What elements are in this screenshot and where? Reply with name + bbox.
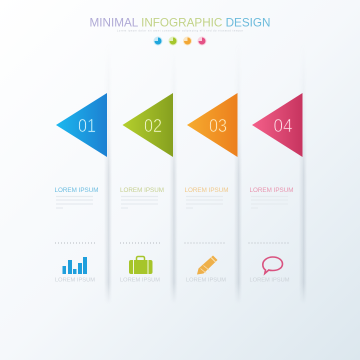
text block 4: LOREM IPSUM (250, 188, 294, 194)
triangle 02 (122, 93, 173, 157)
triangle 01: 01 (78, 116, 96, 136)
text block 4 (250, 188, 294, 208)
column fold shadows (105, 107, 306, 298)
icon: bar chart (62, 257, 87, 274)
text block 3: LOREM IPSUM (184, 188, 228, 194)
triangle 02: 02 (144, 116, 162, 136)
icon: pencil (197, 256, 218, 274)
caption 3: LOREM IPSUM (186, 278, 226, 284)
text block 3 (184, 188, 228, 208)
caption 2: LOREM IPSUM (120, 278, 160, 284)
icon: briefcase (129, 256, 152, 274)
text block 1 (54, 188, 98, 208)
triangle 04 (252, 93, 302, 157)
triangle 01 (56, 93, 107, 157)
caption 4: LOREM IPSUM (250, 278, 290, 284)
triangle 04: 04 (274, 116, 292, 136)
text block 2: LOREM IPSUM (120, 188, 164, 194)
icon: four colored dots (154, 36, 206, 46)
triangle 03: 03 (209, 116, 227, 136)
dotted dividers (55, 242, 290, 244)
text block 2 (120, 188, 164, 208)
icon: speech bubble (263, 257, 282, 274)
caption 1: LOREM IPSUM (55, 278, 95, 284)
subtitle text: Lorem ipsum dolor sit amet consectetur adipiscing elit sed do eiusmod tempor (117, 30, 243, 32)
text block 1: LOREM IPSUM (54, 188, 98, 194)
triangle 03 (187, 93, 238, 157)
title: MINIMAL INFOGRAPHIC DESIGN (90, 16, 270, 30)
